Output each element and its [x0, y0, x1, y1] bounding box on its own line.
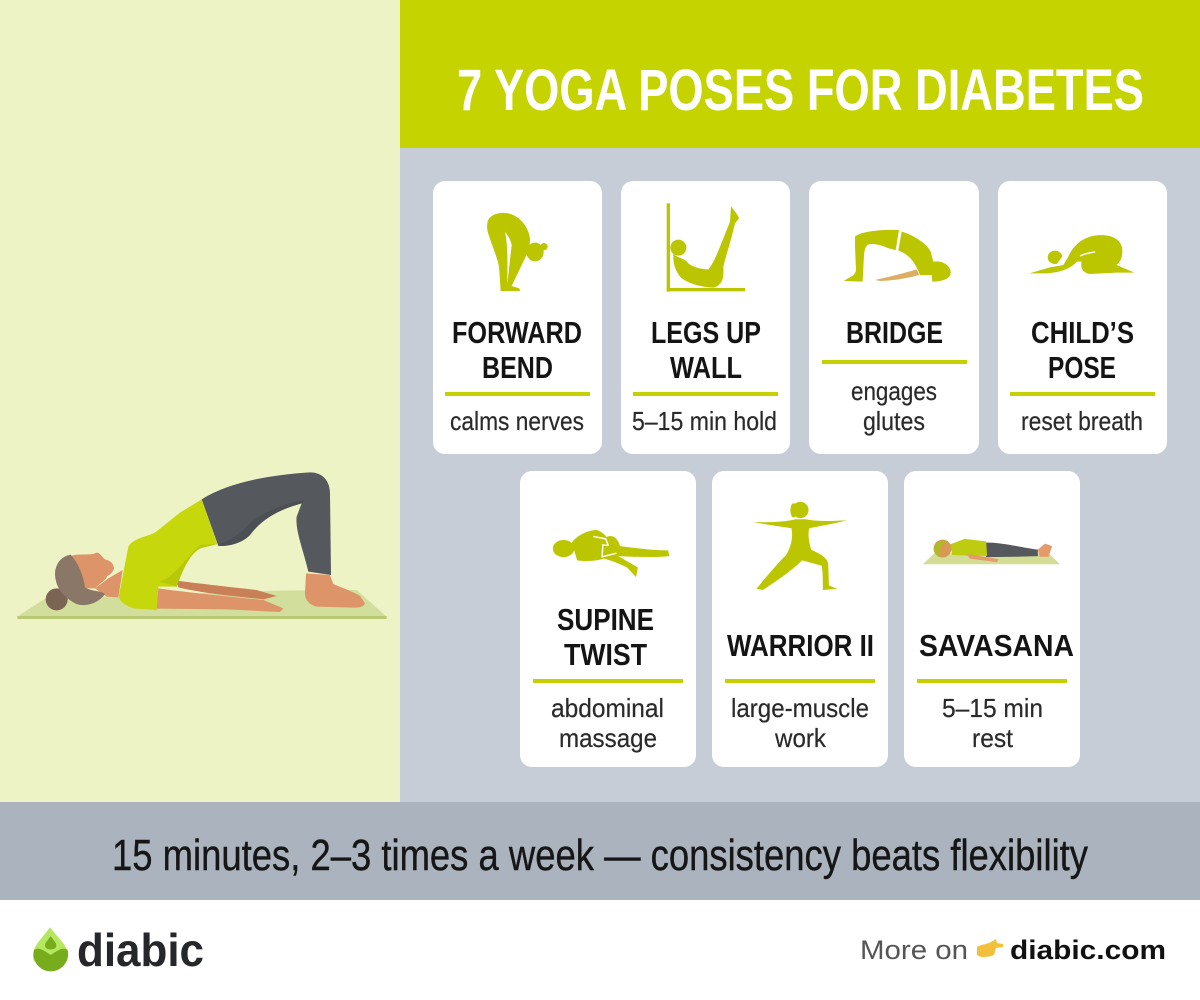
description — [731, 693, 869, 753]
description: glutes — [863, 406, 925, 436]
header banner — [400, 0, 1200, 148]
icon: legs up wall — [667, 203, 745, 292]
icon: green drop — [33, 927, 68, 971]
icon: warrior II — [754, 502, 847, 590]
card: forward bend — [433, 181, 602, 454]
illustration: woman in bridge pose on mat — [17, 472, 387, 619]
description: large-muscle — [731, 693, 869, 723]
link: more on diabic.com — [860, 935, 1166, 965]
description: 5–15 min — [942, 693, 1043, 723]
heading: POSE — [1048, 350, 1116, 385]
description — [551, 693, 664, 753]
logo wordmark: diabic — [77, 924, 204, 976]
link: more on diabic.com: More on — [860, 935, 968, 965]
heading — [1031, 315, 1134, 385]
panel: grey poses background — [400, 148, 1200, 802]
description: reset breath — [1021, 406, 1143, 436]
card: savasana — [904, 471, 1080, 767]
card: bridge — [809, 181, 979, 454]
card: child's pose — [998, 181, 1167, 454]
heading: BRIDGE — [846, 315, 943, 350]
icon: savasana — [923, 539, 1060, 564]
heading — [557, 602, 654, 672]
heading: LEGS UP — [651, 315, 761, 350]
logo: diabic — [33, 924, 204, 976]
bottom banner — [0, 802, 1200, 900]
description — [942, 693, 1043, 753]
heading: WALL — [670, 350, 742, 385]
icon: bridge — [844, 230, 951, 282]
heading: WARRIOR II — [727, 628, 874, 663]
heading — [452, 315, 582, 385]
description: rest — [972, 723, 1014, 753]
description: work — [774, 723, 827, 753]
heading: CHILD’S — [1031, 315, 1134, 350]
icon: child's pose — [1029, 235, 1134, 274]
description: 5–15 min hold — [632, 406, 777, 436]
panel: left illustration background — [0, 0, 400, 802]
heading: BEND — [482, 350, 553, 385]
description: massage — [559, 723, 657, 753]
link: more on diabic.com: diabic.com — [1010, 935, 1166, 965]
description: calms nerves — [450, 406, 584, 436]
description — [851, 376, 937, 436]
icon: pointing hand — [977, 939, 1003, 957]
heading: TWIST — [564, 637, 647, 672]
heading: FORWARD — [452, 315, 582, 350]
icon: forward bend — [487, 213, 548, 291]
heading: SAVASANA — [919, 628, 1074, 663]
heading — [651, 315, 761, 385]
heading: SUPINE — [557, 602, 654, 637]
icon: supine twist — [553, 530, 669, 577]
description: engages — [851, 376, 937, 406]
card: warrior II — [712, 471, 888, 767]
card: legs up wall — [621, 181, 790, 454]
card: supine twist — [520, 471, 696, 767]
description: abdominal — [551, 693, 664, 723]
